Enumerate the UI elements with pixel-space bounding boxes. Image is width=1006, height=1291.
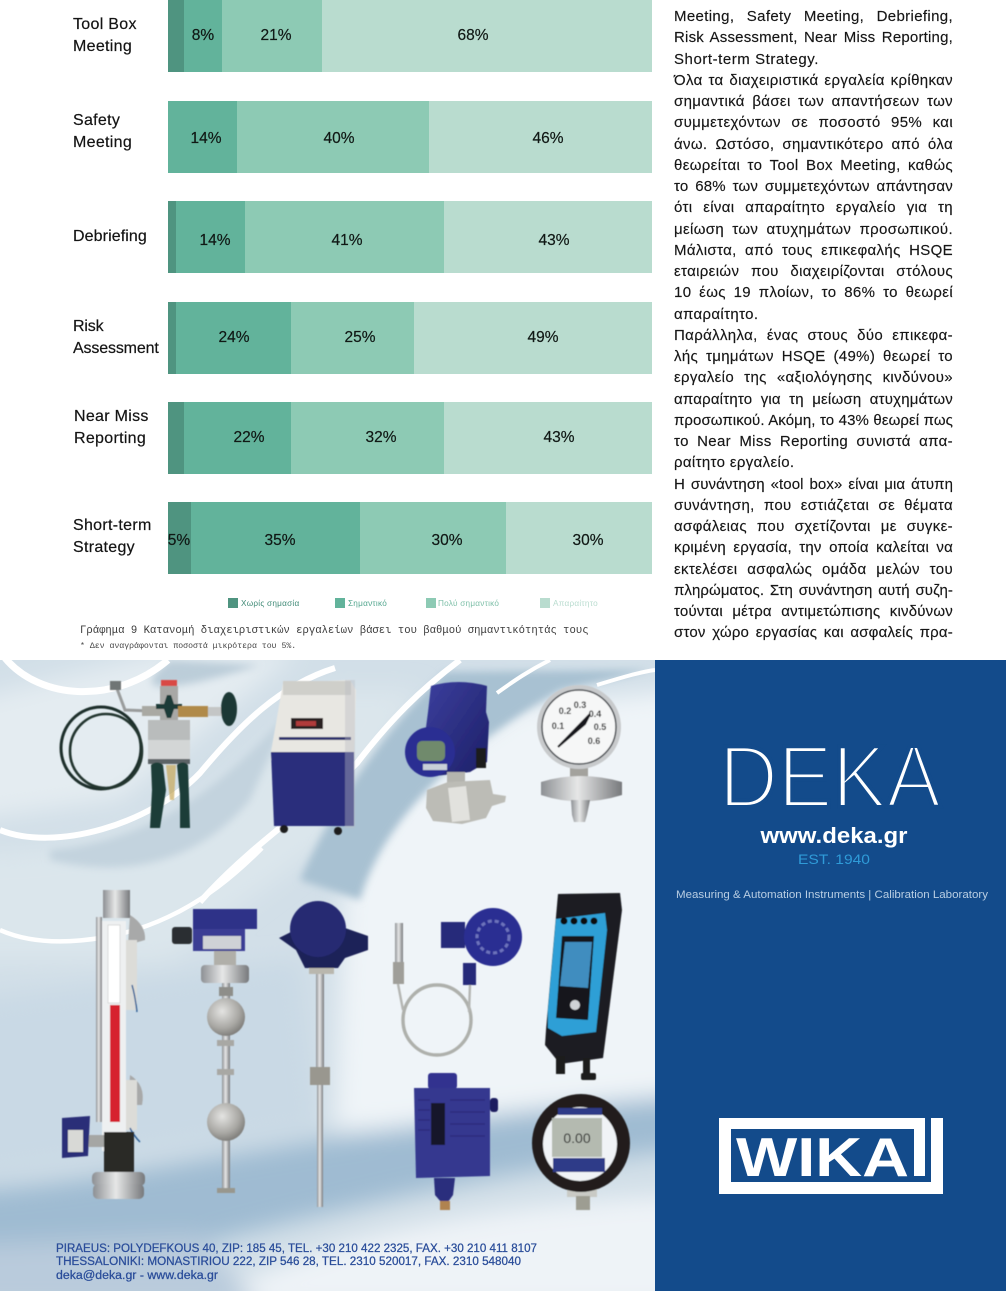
advertisement: DEKA WIKA [0, 660, 1006, 1291]
article text column: Meeting, Safety Meeting, Debriefing, [674, 8, 953, 25]
article text column: απαραίτητο. [674, 306, 758, 322]
article text column: στον χώρο εργασίας και ασφαλείς πρα- [674, 624, 953, 641]
row: Risk Assessment: Risk [73, 318, 104, 335]
row: Tool Box Meeting: Tool Box [73, 16, 137, 33]
row: Risk Assessment: 24% [218, 329, 250, 346]
icon: magnetic level indicator [62, 890, 145, 1199]
article text column: απαραίτητο για τη μείωση ατυχημάτων [674, 390, 953, 408]
website: www.deka.gr [759, 823, 908, 848]
row: Safety Meeting [73, 101, 652, 173]
row: Safety Meeting: 46% [532, 130, 564, 147]
row: Debriefing: 43% [538, 232, 570, 249]
article text column: ασφάλειας που σχετίζονται με συγκε- [674, 518, 953, 535]
established date: EST. 1940 [798, 851, 870, 867]
footnote: * Δεν αναγράφονται ποσοστά μικρότερα του 5%. [80, 642, 296, 651]
icon: handheld calibrator [545, 893, 622, 1080]
row: Risk Assessment: Assessment [73, 340, 159, 357]
row: Debriefing [73, 201, 652, 273]
row: Safety Meeting: 14% [190, 130, 222, 147]
icon: pressure switch [414, 1073, 498, 1210]
legend: Πολύ σημαντικό [438, 599, 499, 608]
article text column: εκτελέσει ασφαλώς ομάδα μελών του [674, 560, 953, 578]
icon: diaphragm pressure gauge [537, 685, 622, 822]
address block: deka@deka.gr - www.deka.gr [56, 1270, 218, 1282]
article text column: 10 έως 19 πλοίων, το 86% το θεωρεί [674, 284, 953, 301]
icon: diaphragm pressure gauge: 0.1 [552, 721, 564, 731]
article text column: το 68% των συμμετεχόντων απάντησαν [674, 178, 953, 195]
article text column: άνω. Ωστόσο, σημαντικότερο από όλα [674, 136, 953, 152]
article text column: κριμένη εργασία, την οποία καλείται να [674, 539, 953, 556]
tagline: Measuring & Automation Instruments | Calibration Laboratory [676, 889, 989, 901]
row: Short-term Strategy: 30% [431, 532, 463, 549]
article text column: προσωπικού. Ακόμη, το 43% θεωρεί πως [674, 412, 953, 429]
icon: diaphragm pressure gauge: 0.3 [574, 700, 586, 710]
row: Short-term Strategy: 5% [168, 532, 190, 549]
article text column: Short-term Strategy. [674, 50, 819, 68]
legend: Σημαντικό [348, 599, 387, 608]
logo: DEKA: DEKA [719, 727, 941, 826]
row: Short-term Strategy: 30% [572, 532, 604, 549]
article text column: συμμετεχόντων σε ποσοστό 95% και [674, 114, 953, 131]
article text column: Η συνάντηση «tool box» είναι μια άτυπη [674, 476, 953, 492]
article text column: Όλα τα διαχειριστικά εργαλεία κρίθηκαν [674, 72, 953, 89]
icon: digital pressure gauge: 0.00 [563, 1130, 591, 1146]
row: Tool Box Meeting: Meeting [73, 38, 132, 55]
article text column: Μάλιστα, από τους επικεφαλής HSQE [674, 242, 953, 259]
row: Debriefing: Debriefing [73, 228, 147, 245]
panel: blue brand column [655, 660, 1006, 1291]
icon: capillary dial thermometer [393, 908, 522, 1055]
row: Short-term Strategy: Strategy [73, 539, 135, 556]
article text column: ραίτητο εργαλείο. [674, 454, 794, 471]
row: Near Miss Reporting: 22% [233, 429, 265, 446]
article text column: ότι είναι απαραίτητο εργαλείο για τη [674, 199, 953, 216]
row: Risk Assessment [72, 302, 652, 374]
icon: diaphragm pressure gauge: 0.6 [588, 736, 600, 746]
icon: thermocouple assembly [279, 901, 368, 1207]
article text column [673, 8, 953, 641]
panel: stacked bar chart of management tools [72, 0, 652, 608]
legend: Χωρίς σημασία [241, 599, 299, 608]
address block: THESSALONIKI: MONASTIRIOU 222, ZIP 546 28, TEL. 2310 520017, FAX. 2310 548040 [56, 1256, 521, 1268]
article text column: μείωση των ατυχημάτων προσωπικού. [674, 220, 953, 238]
icon: diaphragm pressure gauge: 0.5 [594, 722, 606, 732]
article text column: πληρώματος. Στη συνάντηση αυτή συζη- [674, 582, 953, 599]
article text column: το Near Miss Reporting συνιστά απα- [674, 433, 953, 450]
address block [56, 1243, 537, 1282]
row: Debriefing: 41% [331, 232, 363, 249]
icon: dry-well calibrator [271, 680, 356, 835]
article text column: εταιρειών που διαχειρίζονται στόλους [674, 263, 953, 280]
article text column: Παράλληλα, ένας στους δύο επικεφα- [674, 327, 953, 344]
row: Near Miss Reporting: Reporting [74, 430, 146, 447]
icon: hand pressure pump [61, 680, 237, 828]
row: Short-term Strategy: 35% [264, 532, 296, 549]
row: Near Miss Reporting: 32% [365, 429, 397, 446]
icon: diaphragm pressure gauge: 0.2 [559, 706, 571, 716]
article text column: τούνται μέτρα αντιμετώπισης κινδύνων [674, 603, 953, 620]
icon: diaphragm pressure gauge: 0.4 [589, 709, 601, 719]
article text column: Risk Assessment, Near Miss Reporting, [674, 29, 953, 46]
row: Risk Assessment: 49% [527, 329, 559, 346]
legend: Απαραίτητο [553, 599, 598, 608]
row: Risk Assessment: 25% [344, 329, 376, 346]
row: Tool Box Meeting: 21% [260, 27, 292, 44]
row: Near Miss Reporting: 43% [543, 429, 575, 446]
row: Near Miss Reporting [74, 402, 652, 474]
row: Debriefing: 14% [199, 232, 231, 249]
article text column: εργαλείο της «αξιολόγησης κινδύνου» [674, 369, 953, 386]
article text column: λής τμημάτων HSQE (49%) θεωρεί το [674, 348, 953, 365]
legend [228, 598, 598, 608]
row: Tool Box Meeting: 68% [457, 27, 489, 44]
row: Tool Box Meeting [73, 0, 652, 72]
row: Safety Meeting: Meeting [73, 134, 132, 151]
address block: PIRAEUS: POLYDEFKOUS 40, ZIP: 185 45, TEL. +30 210 422 2325, FAX. +30 210 411 8107 [56, 1243, 537, 1255]
logo: WIKA: WIKA [736, 1126, 909, 1188]
article text column: θεωρείται το Tool Box Meeting, καθώς [674, 157, 953, 174]
row: Short-term Strategy: Short-term [73, 517, 152, 534]
article text column: συνάντηση, που εστιάζεται σε θέματα [674, 497, 953, 514]
icon: pressure transmitter [405, 682, 506, 824]
ad photo background [0, 650, 680, 1291]
row: Safety Meeting: 40% [323, 130, 355, 147]
logo: WIKA [719, 1118, 943, 1194]
article text column: σημαντικά βάσει των απαντήσεων των [674, 93, 953, 110]
icon: float level switch [172, 909, 257, 1193]
row: Safety Meeting: Safety [73, 112, 120, 129]
row: Tool Box Meeting: 8% [192, 27, 214, 44]
icon: digital pressure gauge [532, 1094, 630, 1210]
caption: Γράφημα 9 Κατανομή διαχειριστικών εργαλείων βάσει του βαθμού σημαντικότητάς τους [80, 625, 589, 637]
row: Near Miss Reporting: Near Miss [74, 408, 149, 425]
row: Short-term Strategy [73, 502, 652, 574]
